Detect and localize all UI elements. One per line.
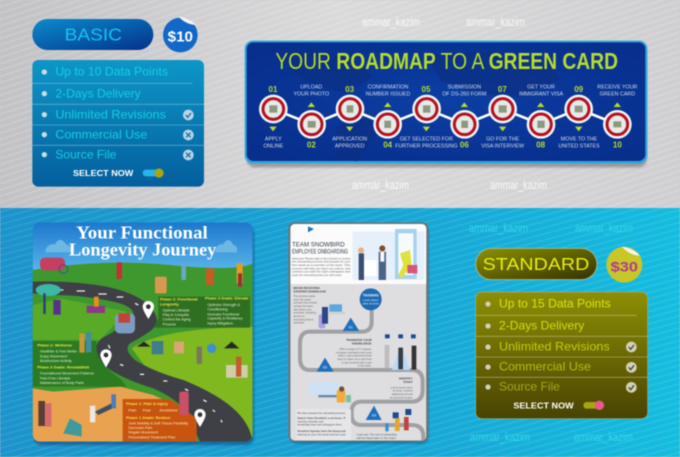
bottom notes: Search Team Snowbird: a set hours, IT <box>297 416 346 420</box>
basic feature card: SELECT NOW <box>73 168 133 178</box>
standard price badge: $30 <box>611 258 638 274</box>
step 2 text: Offer a range of IT, support, <box>339 347 372 351</box>
step numbers: 03 <box>345 85 355 94</box>
step numbers: 02 <box>307 141 316 150</box>
text box: pain and injury: Phase 1: Pain & Injury <box>126 401 169 406</box>
intro text <box>292 256 351 277</box>
bottom notes: Look now: The rest of onboarding <box>357 433 397 437</box>
step labels <box>263 85 638 149</box>
step 3 text: sit amet, consect <box>393 389 413 393</box>
text box: phase 2 goals: Longevity <box>160 301 180 306</box>
text box: phase 2 goals: Increase Functional <box>207 312 239 316</box>
step 1 text: contact the team <box>293 304 314 308</box>
bottom notes: Snowbird Agenda: learn the lineup and <box>297 429 346 433</box>
text box: wellness: Biostructure Activity <box>40 359 72 363</box>
panel: employee onboarding: 03 <box>372 413 377 418</box>
intro text: Welcome! Please take a few minutes to review <box>292 256 351 260</box>
basic title pill: BASIC <box>65 25 122 45</box>
watermarks: ammar_kazim <box>466 17 525 29</box>
watermarks: ammar_kazim <box>575 223 633 235</box>
panel: employee onboarding: 02 <box>323 365 328 370</box>
step numbers: 07 <box>498 85 507 94</box>
text box: pain and injury: Fear <box>143 407 152 412</box>
background: blue lower section <box>0 208 680 457</box>
step 3 text <box>390 376 413 399</box>
basic feature card: Unlimited Revisions <box>55 108 166 121</box>
watermarks <box>352 17 633 444</box>
text box: phase 2 goals: Capacity & Resiliency <box>207 317 243 321</box>
step 2 text: team to reach out to and how <box>337 357 372 361</box>
basic feature card: 2-Days Delivery <box>55 87 141 100</box>
text box: wellness: Pain-Free Lifestyle <box>40 376 70 380</box>
watermarks: ammar_kazim <box>352 180 409 192</box>
bottom notes <box>296 409 397 441</box>
text box: pain and injury: Avoidance <box>159 407 179 412</box>
panel: employee onboarding: 01 <box>348 324 354 329</box>
text box: wellness: Healthier & Feel Better <box>40 349 78 353</box>
step labels: GET YOUR <box>527 85 555 91</box>
step labels: GET SELECTED FOR <box>400 136 453 142</box>
text box: phase 2 goals: Conditioning <box>207 307 228 311</box>
text box: phase 2 goals: Play & Compete <box>163 313 189 317</box>
step 1 text: essential. <box>293 321 305 325</box>
text box: phase 2 goals: Phase 2: Functional <box>160 297 198 302</box>
step 1 text: BEGIN RECEIVING <box>293 286 321 290</box>
basic feature card <box>32 60 204 187</box>
step labels: APPROVED <box>335 143 365 149</box>
world map silhouette <box>280 51 560 162</box>
step 1 text: access to <box>293 314 305 318</box>
team illustration <box>353 229 424 280</box>
step 1 text: schedule, including <box>293 311 316 315</box>
text box: pain and injury: Phase 1 Goals: Restore <box>126 415 171 420</box>
step labels: APPLICATION <box>332 136 367 142</box>
step numbers: 08 <box>536 141 546 150</box>
road <box>33 281 253 442</box>
text box: phase 2 goals: Phase 3 Goals: Elevate <box>205 296 249 301</box>
text box: pain and injury: Decrease Pain <box>128 426 152 430</box>
basic price badge: $10 <box>168 29 193 45</box>
text box: wellness: Maintenance of Body Parts <box>40 381 84 385</box>
bottom notes: will be listed later in the team. <box>357 436 397 440</box>
step labels: OF DS-260 FORM <box>442 92 486 98</box>
team group <box>385 409 411 431</box>
standard feature card: Up to 15 Data Points <box>499 297 611 310</box>
step labels: SUBMISSION <box>448 85 481 91</box>
step 2 text: others, and understand what <box>338 354 372 358</box>
step 1 text: contract has arrived, <box>293 301 318 305</box>
step 1 text: The process starts <box>293 294 316 298</box>
status icons <box>183 110 194 160</box>
text box: phase 2 goals: Injury Mitigation <box>207 321 233 325</box>
heading <box>292 241 348 256</box>
standard feature card: Source File <box>499 381 560 394</box>
step numbers: 04 <box>383 141 393 150</box>
standard feature card: SELECT NOW <box>513 400 574 410</box>
journey title <box>69 222 216 260</box>
step 2 text: TRANSFER YOUR <box>346 338 372 342</box>
standard feature card: 2-Days Delivery <box>499 320 585 333</box>
toggle <box>583 401 604 410</box>
text box: pain and injury: Personalized Treatment Plan <box>128 435 175 439</box>
blue circle step: Lorem ipsum <box>363 298 379 302</box>
step numbers: 05 <box>422 85 431 94</box>
three figures <box>385 334 416 370</box>
bottom notes: meeting schedule and <box>297 419 324 423</box>
text box: wellness: Enjoy Movement <box>40 354 67 358</box>
step 2 text <box>336 338 372 368</box>
text box: phase 2 goals <box>153 296 250 328</box>
step labels: MOVE TO THE <box>561 136 598 142</box>
standard feature card: Unlimited Revisions <box>499 341 610 354</box>
blue circle step: dolor sit amet <box>363 301 379 305</box>
text box: wellness: Foundational Movement Patterns <box>40 372 94 376</box>
bottom notes: training for your first week and the tools <box>297 432 346 436</box>
arrows <box>269 102 621 131</box>
text box: phase 2 goals: Optimal Lifestyle <box>163 308 190 312</box>
step labels: APPLY <box>265 136 282 142</box>
step labels: CONFIRMATION <box>368 85 409 91</box>
roadmap title: YOUR ROADMAP TO A GREEN CARD <box>275 48 618 74</box>
clouds <box>45 240 237 252</box>
triangle step markers <box>317 318 382 420</box>
step 1 text: once the paper <box>293 297 311 301</box>
status icons <box>626 342 637 393</box>
step numbers: 10 <box>613 141 622 150</box>
basic feature card: Source File <box>55 148 116 161</box>
text box: wellness: Phase 3 Goals: Reestablish <box>37 365 90 370</box>
step numbers <box>269 85 622 150</box>
step 3 text: IDENTIFY <box>399 376 413 380</box>
basic price badge <box>163 17 198 52</box>
text box: pain and injury <box>123 399 197 442</box>
basic title pill <box>32 19 153 50</box>
panel: employee onboarding <box>288 222 428 445</box>
step labels: GREEN CARD <box>600 92 635 98</box>
heading: EMPLOYEE ONBOARDING <box>292 249 348 256</box>
step 3 text: adipiscing elit sed <box>392 392 413 396</box>
map pins <box>100 301 206 427</box>
text box: pain and injury: Regain Movement <box>128 431 158 435</box>
milestone circles <box>259 95 632 139</box>
step labels: UNITED STATES <box>558 143 600 149</box>
bottom notes: knowledge base and colleagues there. <box>297 423 343 427</box>
watermarks: ammar_kazim <box>470 432 530 444</box>
desk figure <box>319 304 345 328</box>
text box: phase 2 goals: Process <box>163 322 176 326</box>
basic feature card: Commercial Use <box>55 128 147 141</box>
text box: phase 2 goals: Optimize Strength & <box>207 303 241 307</box>
text box: pain and injury: Pain <box>128 407 136 412</box>
logo <box>308 226 314 232</box>
basic feature card: Up to 10 Data Points <box>55 65 168 78</box>
watermarks: ammar_kazim <box>574 432 633 444</box>
journey title: Your Functional <box>76 222 208 242</box>
background: grey upper section <box>0 0 680 208</box>
step numbers: 01 <box>269 85 278 94</box>
step 1 text: everything that is <box>293 317 314 321</box>
step 1 text: who follow your <box>293 307 312 311</box>
connector line <box>273 109 617 124</box>
step 3 text: STAFF <box>403 380 413 384</box>
step 1 text: STARTER DOWNLOAD <box>293 290 327 294</box>
step 2 text: KNOWLEDGE <box>352 342 372 346</box>
standard feature card: Commercial Use <box>499 361 591 374</box>
text box: wellness: Phase 2: Wellness <box>37 342 73 347</box>
intro text: process will help you learn our culture, and <box>292 266 351 270</box>
panel: roadmap to a green card <box>245 41 647 167</box>
standard feature card <box>476 292 648 419</box>
toggle <box>143 168 164 178</box>
text box: pain and injury: Joint Mobility & Soft Tissue Flexibility <box>128 422 188 426</box>
intro text: tools for everything that you will need. <box>292 273 342 277</box>
winding path <box>300 305 423 445</box>
step labels: VISA INTERVIEW <box>481 143 525 149</box>
people illustrations <box>36 258 248 437</box>
desk group illustration <box>308 382 351 403</box>
step 2 text: to get involved with a role <box>342 360 372 364</box>
step numbers: 06 <box>460 141 469 150</box>
step labels: UPLOAD <box>300 85 322 91</box>
standard title pill: STANDARD <box>483 254 589 274</box>
step 1 text <box>293 286 327 325</box>
standard price badge <box>606 247 642 283</box>
blue circle step: TRAINING <box>363 294 379 298</box>
standard title pill <box>476 248 597 280</box>
step labels: FURTHER PROCESSING <box>395 143 458 149</box>
intro text: first week as a member of the team. This <box>292 263 351 267</box>
watermarks: ammar_kazim <box>469 223 528 235</box>
intro text: connect you with the right colleagues and <box>292 270 351 274</box>
intro text: the onboarding process and prepare for your <box>292 260 350 264</box>
panel: basic pricing <box>32 17 204 187</box>
step 2 text: company orientation and meet <box>336 350 372 354</box>
step labels: ONLINE <box>263 143 284 149</box>
heading: TEAM SNOWBIRD <box>292 241 345 248</box>
watermarks: ammar_kazim <box>362 17 420 29</box>
text box: wellness <box>33 341 127 387</box>
panel: standard pricing <box>476 247 648 419</box>
panel: functional longevity journey <box>33 222 254 445</box>
step numbers: 09 <box>574 85 584 94</box>
step labels: RECEIVE YOUR <box>597 85 638 91</box>
watermarks: ammar_kazim <box>490 180 547 192</box>
step 2 text: in the team. <box>358 364 372 368</box>
step 3 text: Lorem ipsum dolor <box>391 385 413 389</box>
bottom notes: We have prepared the onboarding process: <box>297 411 346 415</box>
step labels: NUMBER ISSUED <box>366 92 410 98</box>
journey title: Longevity Journey <box>69 240 216 260</box>
step labels: GO FOR THE <box>486 136 520 142</box>
step labels: YOUR PHOTO <box>293 92 329 98</box>
text box: phase 2 goals: Control the Aging <box>163 318 191 322</box>
blue circle step <box>360 288 382 310</box>
step labels: IMMIGRANT VISA <box>519 92 563 98</box>
step 3 text: do eiusmod tempor <box>390 395 413 399</box>
